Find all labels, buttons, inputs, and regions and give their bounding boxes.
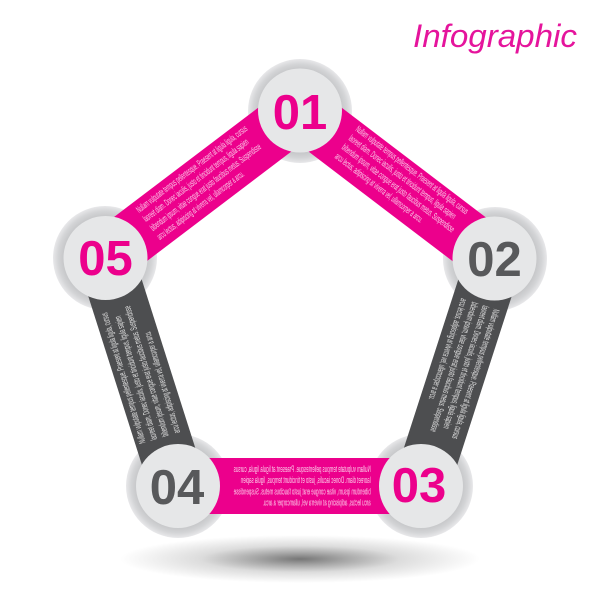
band: 05 to 01: laoreet diam. Donec iaculis, justo et tincidunt tempus, ligula sapien <box>141 136 251 224</box>
node 04: 04 <box>150 461 204 515</box>
node 01: 01 <box>273 86 327 140</box>
band: 03 to 04: bibendum ipsum, vitae congue erat justo faucibus metus. Suspendisse <box>234 485 371 496</box>
band: 02 to 03: laoreet diam. Donec iaculis, justo et tincidunt tempus, ligula sapien <box>441 304 492 430</box>
node 02 <box>452 216 536 300</box>
node 03: 03 <box>392 459 446 513</box>
band: 03 to 04: arcu lectus, adipiscing at viverra vel, ullamcorper a arcu. <box>263 497 371 508</box>
band: 01 to 02: Nullam vulputate tempus pellentesque. Praesent at ligula ligula, cursus <box>354 123 471 216</box>
title: Infographic <box>413 18 577 54</box>
band: 02 to 03: Nullam vulputate tempus pellentesque. Praesent at ligula ligula, cursus <box>450 308 502 441</box>
ground shadow <box>120 535 480 583</box>
band: 04 to 05: laoreet diam. Donec iaculis, justo et tincidunt tempus, ligula sapien <box>112 315 159 442</box>
band: 01 to 02 <box>300 110 494 258</box>
band: 04 to 05: Nullam vulputate tempus pellentesque. Praesent at ligula ligula, cursus <box>98 311 148 445</box>
node 05 <box>64 216 148 300</box>
node 03 <box>379 444 463 528</box>
band: 05 to 01 <box>106 110 300 258</box>
node 01 <box>258 68 342 152</box>
node 05: 05 <box>78 232 133 286</box>
band: 02 to 03: arcu lectus, adipiscing at viverra vel, ullamcorper a arcu. <box>427 297 470 402</box>
band: 01 to 02: bibendum ipsum, vitae congue erat justo faucibus metus. Suspendisse <box>340 141 457 234</box>
node 04 <box>136 444 220 528</box>
band: 05 to 01: Nullam vulputate tempus pellentesque. Praesent at ligula ligula, cursus <box>134 123 249 215</box>
band: 03 to 04: laoreet diam. Donec iaculis, justo et tincidunt tempus, ligula sapien <box>241 474 371 485</box>
band: 03 to 04: Nullam vulputate tempus pellentesque. Praesent at ligula ligula, cursus <box>234 463 371 474</box>
band: 01 to 02: laoreet diam. Donec iaculis, justo et tincidunt tempus, ligula sapien <box>347 132 459 221</box>
node 02: 02 <box>467 233 522 287</box>
band: 04 to 05: bibendum ipsum, vitae congue erat justo faucibus metus. Suspendisse <box>121 305 171 438</box>
band: 02 to 03 <box>418 258 502 486</box>
band: 04 to 05: arcu lectus, adipiscing at viverra vel, ullamcorper a arcu. <box>141 330 182 435</box>
band: 02 to 03: bibendum ipsum, vitae congue erat justo faucibus metus. Suspendisse <box>428 301 481 434</box>
band: 04 to 05 <box>98 258 182 486</box>
band: 03 to 04 <box>178 458 421 514</box>
band: 05 to 01: arcu lectus, adipiscing at viverra vel, ullamcorper a arcu. <box>154 168 246 242</box>
band: 01 to 02: arcu lectus, adipiscing at viverra vel, ullamcorper a arcu. <box>333 150 426 225</box>
outer rings <box>53 59 547 538</box>
band: 05 to 01: bibendum ipsum, vitae congue erat justo faucibus metus. Suspendisse <box>147 141 263 233</box>
